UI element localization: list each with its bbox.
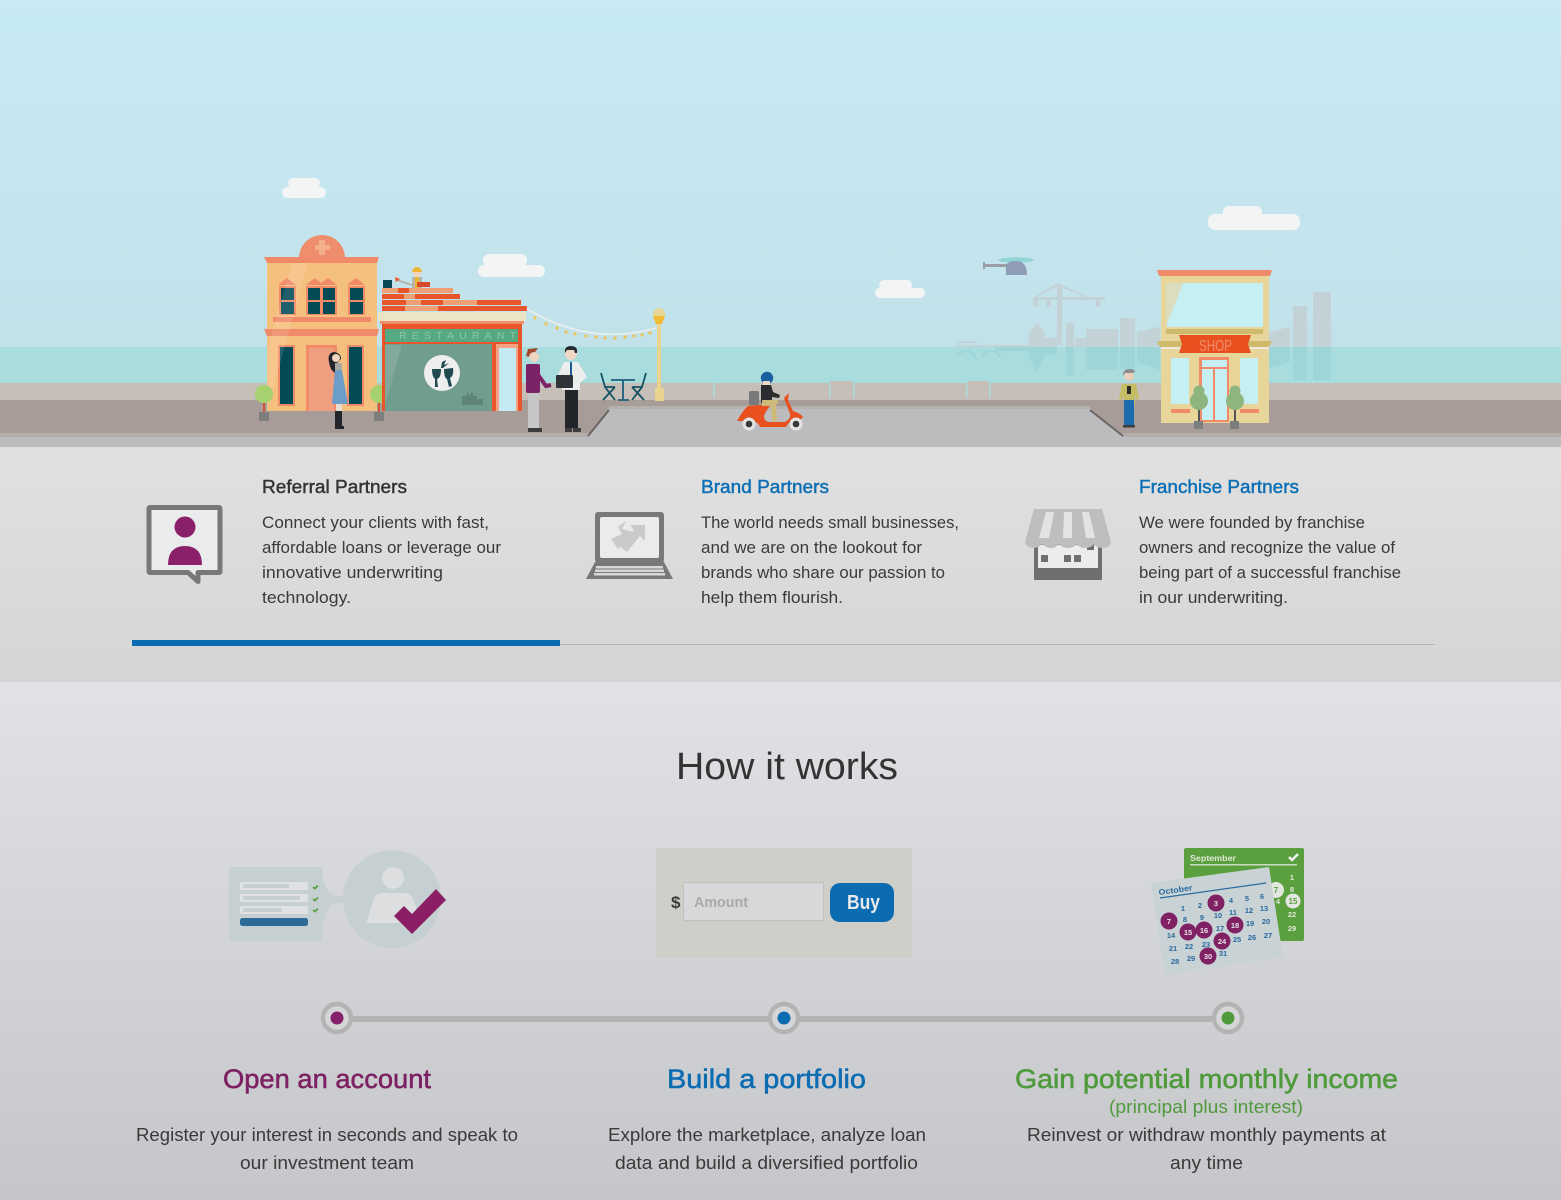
illustration: calendars: 1 (1290, 873, 1294, 882)
text: referral description: technology. (262, 588, 351, 607)
step: open an account: Open an account (223, 1064, 431, 1094)
illustration: calendars: 31 (1219, 949, 1227, 958)
step: gain potential monthly income: any time (1170, 1153, 1243, 1173)
illustration: calendars: 23 (1202, 940, 1210, 949)
building: shop (1157, 270, 1272, 423)
heading: franchise partners: Franchise Partners (1139, 476, 1299, 497)
timeline (323, 1004, 1242, 1032)
panel: street scene hero (0, 0, 1561, 447)
illustration: amount and buy form: Amount (694, 894, 748, 911)
illustration: calendars: 4 (1276, 897, 1281, 906)
illustration: calendars: 11 (1229, 908, 1237, 917)
illustration: calendars: 29 (1187, 954, 1195, 963)
illustration: calendars: 30 (1204, 952, 1212, 961)
text: brand description: brands who share our passion to (701, 563, 945, 582)
building: orange townhouse (264, 235, 379, 411)
potted trees by shop (1190, 386, 1244, 429)
heading: referral partners: Referral Partners (262, 476, 407, 497)
illustration: calendars: 15 (1289, 897, 1298, 906)
harbour wall (0, 381, 1561, 401)
text: franchise description: being part of a successful franchise (1139, 563, 1401, 582)
step: open an account (136, 1064, 518, 1173)
step: gain potential monthly income (1015, 1064, 1398, 1173)
two men shaking hands (526, 346, 587, 432)
step: gain potential monthly income: Gain potential monthly income (1015, 1064, 1398, 1094)
step: build a portfolio: Build a portfolio (667, 1064, 866, 1094)
panel: partner types (0, 447, 1561, 682)
text: brand description: and we are on the lookout for (701, 538, 922, 557)
step: build a portfolio: Explore the marketplace, analyze loan (608, 1125, 926, 1145)
construction worker (383, 267, 430, 288)
illustration: account form and user (229, 850, 446, 948)
building: shop: SHOP (1199, 338, 1232, 355)
text: referral description (262, 513, 501, 607)
illustration: amount and buy form: Buy (847, 892, 881, 914)
illustration: calendars: 5 (1245, 894, 1249, 903)
step: build a portfolio: data and build a diversified portfolio (615, 1153, 918, 1173)
icon: storefront (1025, 509, 1111, 580)
panel: how it works (0, 682, 1561, 1200)
illustration: calendars: 28 (1171, 957, 1179, 966)
text: brand description: The world needs small businesses, (701, 513, 959, 532)
text: brand description (701, 513, 959, 607)
potted trees by townhouse (255, 385, 388, 421)
illustration: calendars: October (1158, 883, 1193, 897)
illustration: amount and buy form: $ (671, 893, 681, 912)
illustration: calendars: 12 (1245, 906, 1253, 915)
pavement and road (0, 400, 1561, 447)
pedestrian with phone (1119, 369, 1139, 428)
step: open an account: our investment team (240, 1153, 414, 1173)
partner: franchise (1025, 476, 1401, 607)
step: open an account: Register your interest in seconds and speak to (136, 1125, 518, 1145)
building: restaurant: RESTAURANT (399, 330, 517, 342)
text: referral description: Connect your clients with fast, (262, 513, 489, 532)
illustration: calendars (1151, 848, 1304, 975)
text: franchise description: owners and recognize the value of (1139, 538, 1395, 557)
illustration: calendars: September (1190, 854, 1236, 863)
step: gain potential monthly income: (principal plus interest) (1109, 1096, 1303, 1117)
illustration: calendars: 24 (1218, 937, 1227, 946)
text: franchise description: in our underwriting. (1139, 588, 1288, 607)
city skyline (955, 283, 1331, 380)
illustration: calendars: 8 (1183, 915, 1187, 924)
string lights (527, 309, 656, 340)
illustration: calendars: 7 (1167, 917, 1171, 926)
cafe table and chairs (601, 373, 646, 400)
illustration: calendars: 22 (1185, 942, 1193, 951)
icon: laptop (586, 512, 673, 579)
illustration: calendars: 17 (1216, 924, 1224, 933)
illustration: calendars: 13 (1260, 904, 1268, 913)
illustration: calendars: 16 (1200, 926, 1208, 935)
illustration: calendars: 15 (1184, 928, 1192, 937)
illustration: calendars: 18 (1231, 921, 1239, 930)
text: referral description: affordable loans or leverage our (262, 538, 501, 557)
step marker: green (1214, 1004, 1242, 1032)
text: brand description: help them flourish. (701, 588, 843, 607)
step: gain potential monthly income: Reinvest or withdraw monthly payments at (1027, 1125, 1386, 1145)
step: build a portfolio (608, 1064, 926, 1173)
illustration: amount and buy form (656, 848, 912, 958)
text: franchise description (1139, 513, 1401, 607)
illustration: calendars: 26 (1248, 933, 1256, 942)
brick wall under construction (382, 288, 527, 311)
step marker: blue (770, 1004, 798, 1032)
text: franchise description: We were founded by franchise (1139, 513, 1365, 532)
illustration: calendars: 27 (1264, 931, 1272, 940)
step marker: purple (323, 1004, 351, 1032)
illustration: calendars: 9 (1200, 913, 1204, 922)
woman in blue dress (329, 352, 348, 429)
partner: brand (586, 476, 959, 607)
heading: brand partners: Brand Partners (701, 476, 829, 497)
illustration: calendars: 29 (1288, 924, 1296, 933)
illustration: calendars: 4 (1229, 896, 1234, 905)
clouds (282, 178, 1300, 298)
illustration: calendars: 20 (1262, 917, 1270, 926)
tab progress bar (132, 640, 1435, 646)
building: restaurant (378, 312, 526, 411)
partner: referral (149, 476, 501, 607)
illustration: calendars: 3 (1214, 899, 1218, 908)
illustration: calendars: 8 (1290, 885, 1294, 894)
illustration: calendars: 22 (1288, 910, 1296, 919)
helicopter (983, 257, 1034, 275)
illustration: calendars: 21 (1169, 944, 1177, 953)
title: How it works (676, 746, 898, 788)
illustration: calendars: 6 (1260, 892, 1264, 901)
street lamp (653, 308, 665, 401)
illustration: calendars: 7 (1274, 886, 1279, 895)
text: referral description: innovative underwriting (262, 563, 443, 582)
illustration: calendars: 1 (1181, 904, 1185, 913)
illustration: calendars: 19 (1246, 919, 1254, 928)
illustration: calendars: 2 (1198, 901, 1202, 910)
illustration: calendars: 10 (1214, 911, 1222, 920)
icon: speech bubble with person (149, 508, 220, 582)
illustration: calendars: 25 (1233, 935, 1241, 944)
scooter rider (737, 372, 803, 430)
illustration: calendars: 14 (1167, 931, 1176, 940)
